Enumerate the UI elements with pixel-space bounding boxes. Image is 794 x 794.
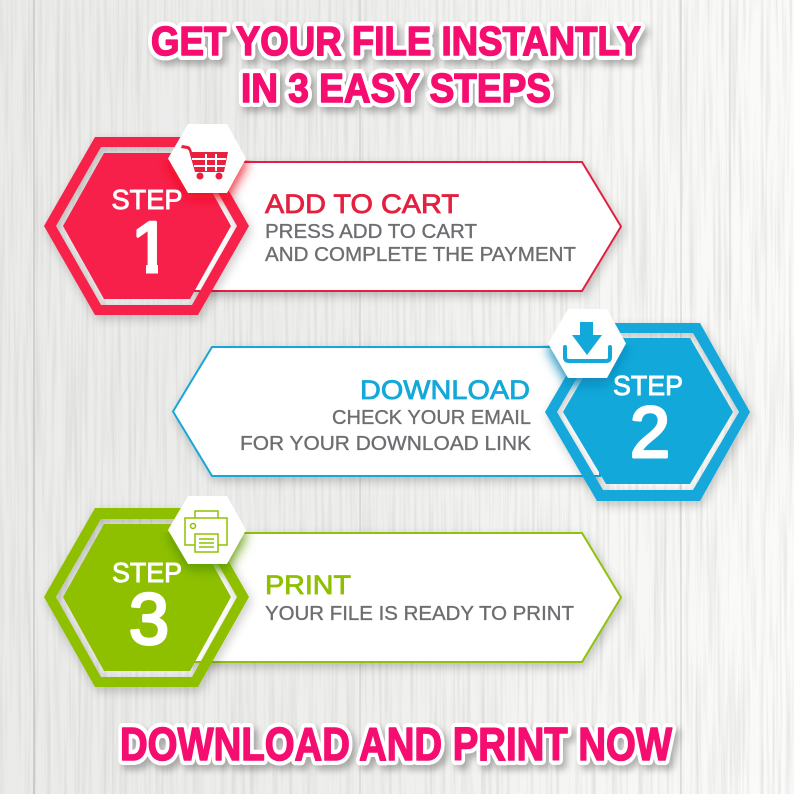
- label: step 2: STEP: [613, 370, 683, 401]
- banner: step 1: [190, 162, 621, 291]
- text block: step 1: PRESS ADD TO CART: [265, 221, 477, 243]
- number: 3: 3: [129, 580, 169, 660]
- footer call to action: DOWNLOAD AND PRINT NOW: [120, 718, 672, 770]
- panel: step 3: [44, 496, 621, 687]
- label: step 1: STEP: [112, 184, 182, 215]
- text block: step 2: [240, 407, 532, 455]
- title: IN 3 EASY STEPS: [241, 65, 551, 111]
- heading: print: PRINT: [265, 570, 351, 600]
- panel: step 1: [44, 124, 621, 315]
- hexagon: step 1: [44, 137, 249, 315]
- heading: download: DOWNLOAD: [360, 375, 530, 405]
- banner: step 3: [190, 533, 621, 662]
- icon hexagon: cart: [168, 124, 246, 198]
- text block: step 2: FOR YOUR DOWNLOAD LINK: [240, 433, 532, 455]
- number: 2: 2: [630, 393, 670, 473]
- title: [151, 18, 641, 111]
- footer call to action: DOWNLOAD AND PRINT NOW: [120, 718, 672, 770]
- title: GET YOUR FILE INSTANTLY: [151, 18, 641, 64]
- hexagon: step 2: [545, 323, 750, 501]
- text block: step 3: YOUR FILE IS READY TO PRINT: [265, 603, 574, 625]
- title: GET YOUR FILE INSTANTLY: [151, 18, 641, 64]
- heading: add to cart: ADD TO CART: [265, 189, 459, 219]
- icon hexagon: printer: [168, 496, 246, 570]
- text block: step 1: [265, 221, 576, 266]
- text block: step 1: AND COMPLETE THE PAYMENT: [265, 244, 576, 266]
- panel: step 2: [173, 309, 750, 501]
- banner: step 2: [173, 347, 600, 476]
- title: IN 3 EASY STEPS: [241, 65, 551, 111]
- icon hexagon: download: [548, 309, 626, 384]
- number: 1: 1: [131, 208, 171, 288]
- hexagon: step 3: [44, 508, 249, 687]
- label: step 3: STEP: [112, 557, 182, 588]
- text block: step 2: CHECK YOUR EMAIL: [332, 407, 531, 429]
